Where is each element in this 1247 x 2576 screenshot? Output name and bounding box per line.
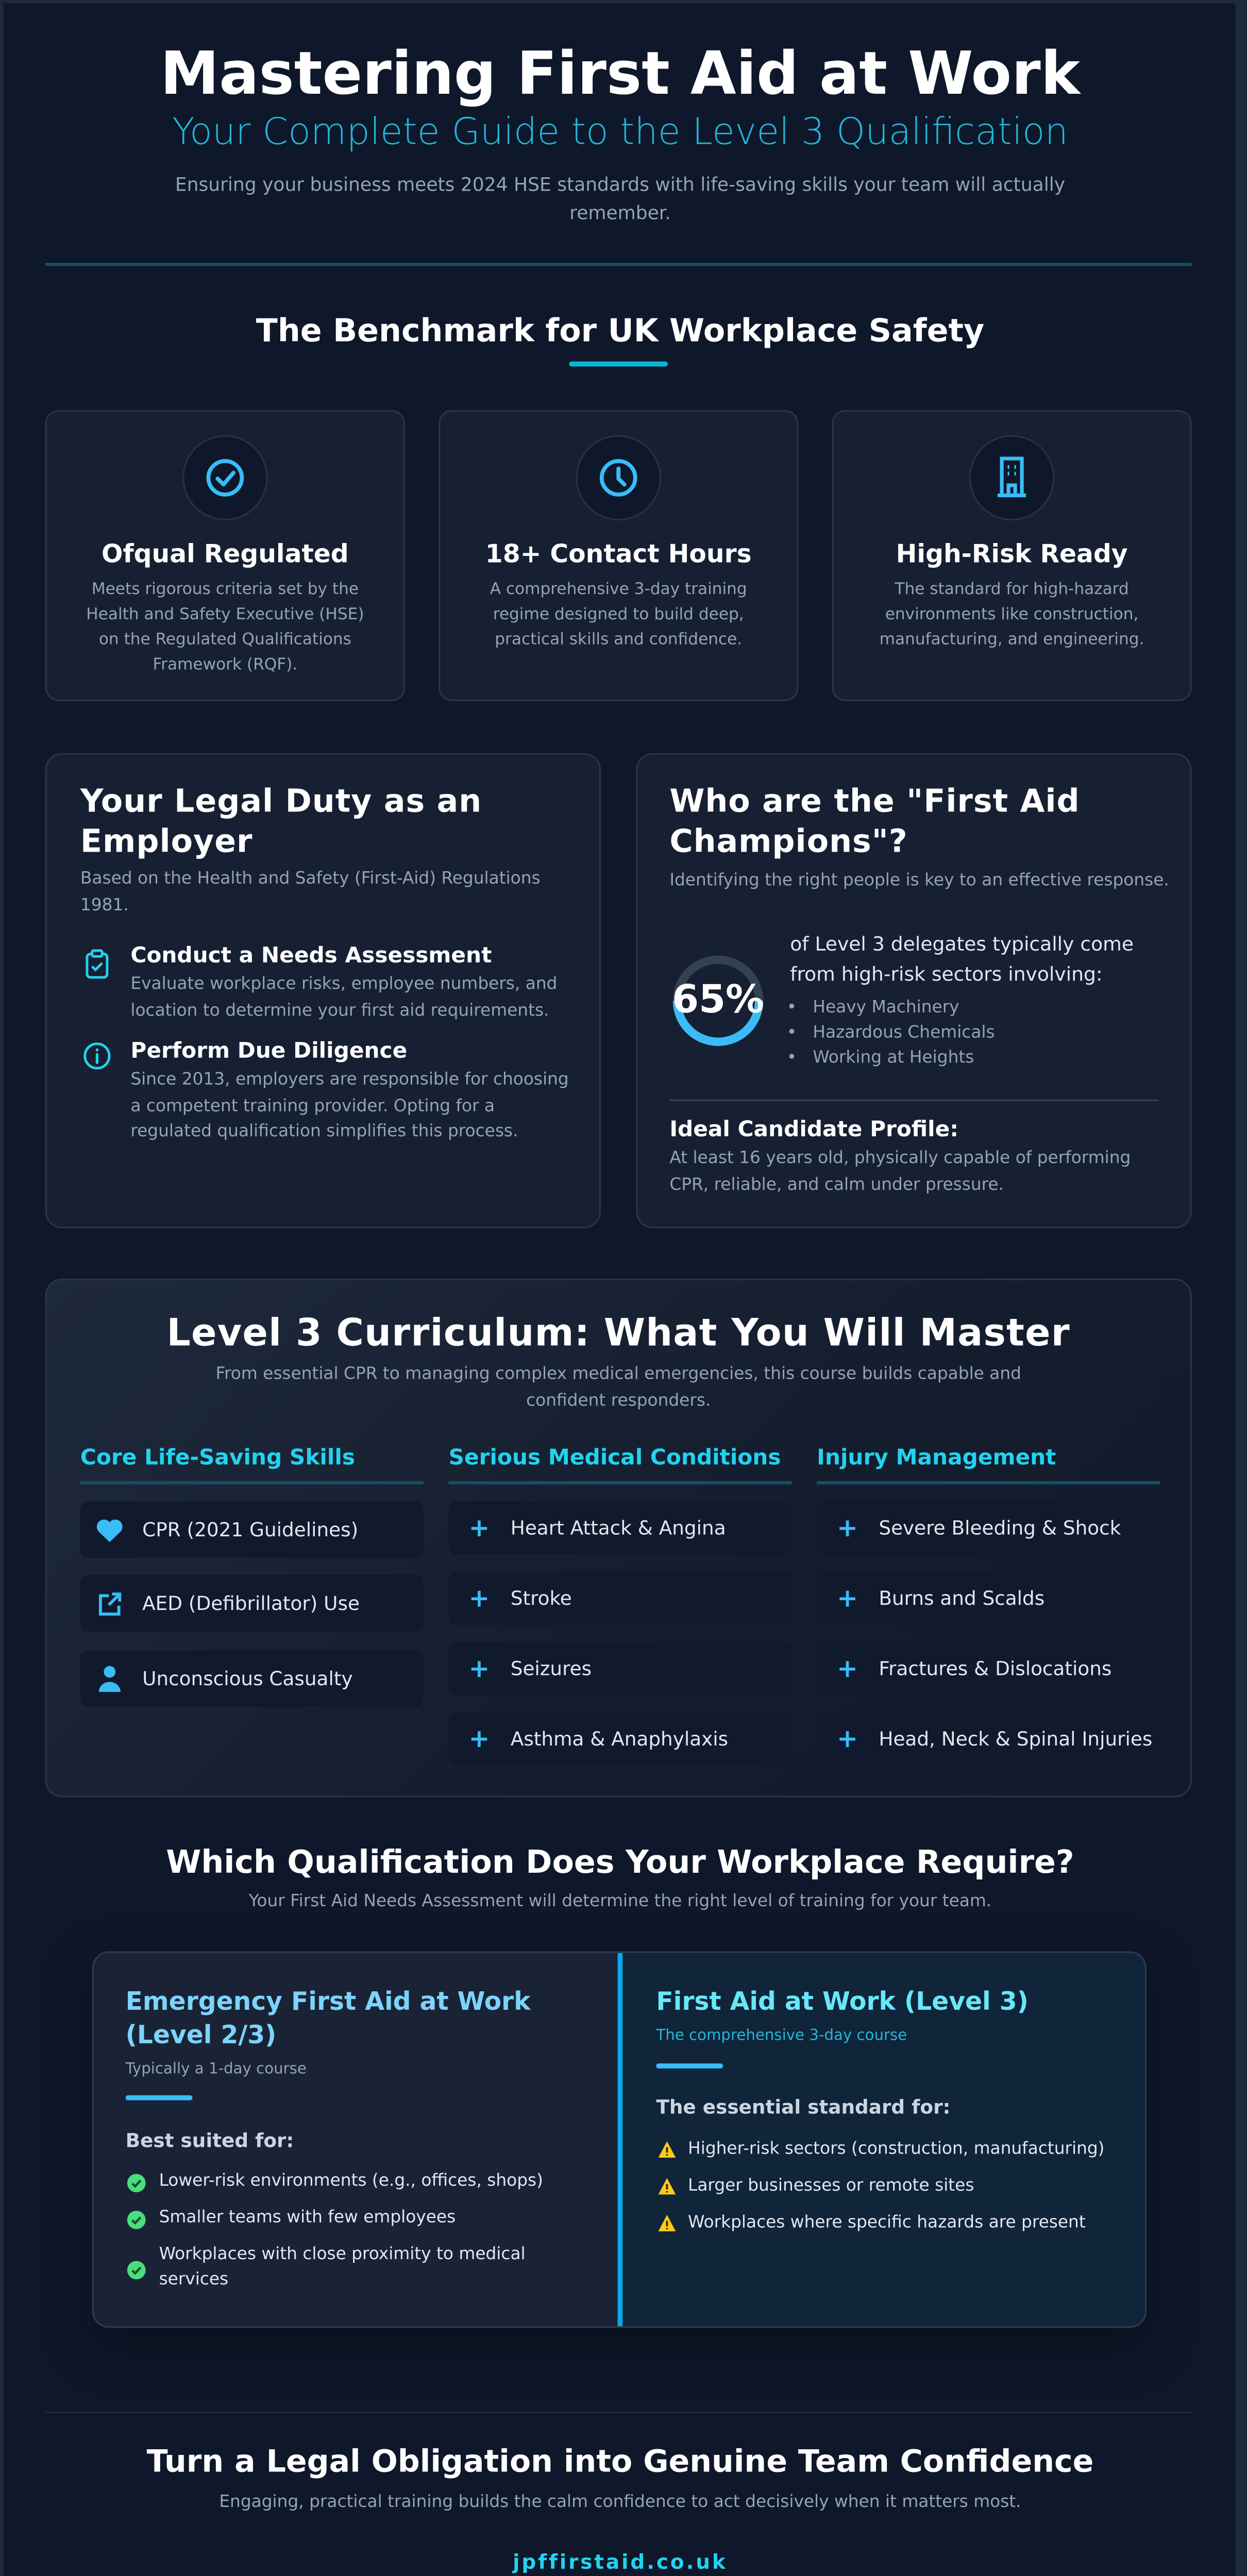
column: medical conditions: Serious Medical Conditions bbox=[449, 1446, 781, 1471]
card text: on the Regulated Qualifications bbox=[99, 631, 351, 649]
item: + bbox=[837, 1583, 858, 1613]
column: core skills: Core Life-Saving Skills bbox=[80, 1446, 355, 1471]
intro text: remember. bbox=[569, 202, 671, 224]
card text bbox=[490, 581, 747, 649]
item bbox=[817, 1571, 1160, 1625]
sector list: • Heavy Machinery bbox=[787, 999, 959, 1018]
item: AED bbox=[80, 1575, 424, 1632]
curriculum subtitle bbox=[47, 1362, 1190, 1414]
list: best suited: Workplaces with close proximity to medical bbox=[159, 2246, 526, 2264]
card: 18+ Contact Hours bbox=[439, 410, 798, 701]
item bbox=[817, 1712, 1160, 1766]
item bbox=[817, 1642, 1160, 1696]
item: + bbox=[469, 1653, 490, 1684]
card text: The standard for high-hazard bbox=[895, 581, 1129, 599]
item: + bbox=[837, 1724, 858, 1754]
item: due diligence bbox=[83, 1039, 569, 1141]
item: Seizures bbox=[511, 1657, 592, 1680]
intro text: Ensuring your business meets 2024 HSE standards with life-saving skills your team will actually bbox=[175, 174, 1065, 196]
option: first aid at work level 3: The comprehensive 3-day course bbox=[656, 2028, 907, 2045]
icon: clipboard bbox=[86, 949, 108, 979]
list: best suited bbox=[126, 2169, 611, 2303]
list: best suited: services bbox=[159, 2271, 228, 2290]
candidate profile bbox=[669, 1116, 1172, 1200]
comparison box bbox=[92, 1952, 1147, 2328]
panel subtitle: Based on the Health and Safety (First-Aid) Regulations bbox=[80, 870, 541, 889]
option: emergency first aid: (Level 2/3) bbox=[126, 2020, 276, 2050]
curriculum subtitle: From essential CPR to managing complex medical emergencies, this course builds capable and bbox=[216, 1366, 1021, 1384]
card text bbox=[880, 581, 1144, 649]
list: essential for: Larger businesses or remote sites bbox=[688, 2177, 974, 2196]
item: due diligence: a competent training provider. Opting for a bbox=[130, 1097, 495, 1115]
card text: environments like construction, bbox=[885, 606, 1138, 624]
card text: regime designed to build deep, bbox=[493, 606, 744, 624]
card: Ofqual Regulated bbox=[45, 410, 405, 701]
icon: check circle bbox=[182, 435, 268, 520]
item: CPR bbox=[80, 1501, 424, 1558]
section heading: which qualification bbox=[0, 1841, 1240, 1921]
item: needs assessment: Conduct a Needs Assessment bbox=[130, 944, 492, 969]
title: Mastering First Aid at Work bbox=[160, 40, 1080, 109]
panel title: Employer bbox=[80, 823, 252, 860]
panel title bbox=[80, 783, 482, 860]
stat text bbox=[790, 932, 1134, 986]
item: due diligence: regulated qualification simplifies this process. bbox=[130, 1123, 518, 1141]
candidate profile: Ideal Candidate Profile: bbox=[669, 1118, 958, 1143]
item: Head, Neck & Spinal Injuries bbox=[879, 1727, 1152, 1751]
item: + bbox=[469, 1583, 490, 1613]
panel: first aid champions bbox=[636, 753, 1192, 1228]
card: High-Risk Ready bbox=[832, 410, 1192, 701]
section heading: benchmark: The Benchmark for UK Workplace Safety bbox=[256, 313, 984, 350]
column: medical conditions bbox=[449, 1443, 791, 1777]
intro text bbox=[175, 174, 1065, 224]
sector list bbox=[787, 999, 995, 1067]
option: emergency first aid: Emergency First Aid at Work bbox=[126, 1987, 531, 2016]
panel title bbox=[669, 783, 1080, 860]
section heading: which qualification: Which Qualification Does Your Workplace Require? bbox=[166, 1844, 1074, 1881]
option: emergency first aid bbox=[94, 1953, 619, 2330]
candidate profile: At least 16 years old, physically capable of performing bbox=[669, 1150, 1131, 1168]
item: due diligence: Perform Due Diligence bbox=[130, 1039, 407, 1064]
header bbox=[160, 40, 1081, 224]
panel: curriculum bbox=[45, 1279, 1192, 1798]
card title: Ofqual Regulated bbox=[102, 539, 349, 569]
item: Severe Bleeding & Shock bbox=[879, 1516, 1121, 1539]
list: essential for: Higher-risk sectors (construction, manufacturing) bbox=[688, 2141, 1104, 2159]
curriculum subtitle: confident responders. bbox=[526, 1392, 711, 1410]
item: CPR: CPR (2021 Guidelines) bbox=[142, 1518, 358, 1541]
column: injury management: Injury Management bbox=[817, 1446, 1056, 1471]
card text: manufacturing, and engineering. bbox=[880, 631, 1144, 649]
item bbox=[449, 1642, 791, 1696]
subtitle: Your Complete Guide to the Level 3 Qualification bbox=[172, 112, 1068, 154]
item: Stroke bbox=[511, 1586, 572, 1610]
option: first aid at work level 3 bbox=[622, 1953, 1148, 2330]
footer text: Engaging, practical training builds the calm confidence to act decisively when it matters most. bbox=[219, 2494, 1021, 2512]
panel title: Your Legal Duty as an bbox=[80, 783, 482, 820]
item: due diligence: Since 2013, employers are responsible for choosing bbox=[130, 1071, 569, 1090]
item: + bbox=[837, 1513, 858, 1543]
card text: Health and Safety Executive (HSE) bbox=[86, 606, 364, 624]
option: first aid at work level 3: First Aid at Work (Level 3) bbox=[656, 1987, 1029, 2016]
item: needs assessment: location to determine your first aid requirements. bbox=[130, 1002, 549, 1020]
option: emergency first aid: Best suited for: bbox=[126, 2129, 294, 2152]
stat text: from high-risk sectors involving: bbox=[790, 962, 1103, 986]
card text: Meets rigorous criteria set by the bbox=[92, 581, 359, 599]
card text: A comprehensive 3-day training bbox=[490, 581, 747, 599]
ring chart 65%: 65% bbox=[672, 979, 764, 1023]
panel subtitle bbox=[80, 870, 541, 916]
ring chart 65% bbox=[672, 955, 764, 1046]
item: needs assessment: Evaluate workplace risks, employee numbers, and bbox=[130, 976, 557, 994]
item: needs assessment bbox=[86, 944, 557, 1020]
website: jpffirstaid.co.uk bbox=[513, 2550, 728, 2574]
list: best suited: Lower-risk environments (e.g., offices, shops) bbox=[159, 2172, 543, 2191]
card text bbox=[86, 581, 364, 674]
card text: Framework (RQF). bbox=[153, 656, 297, 674]
panel subtitle: 1981. bbox=[80, 897, 129, 916]
item: Fractures & Dislocations bbox=[879, 1657, 1111, 1680]
list: essential for bbox=[656, 2137, 1141, 2254]
item: + bbox=[837, 1653, 858, 1684]
item bbox=[817, 1501, 1160, 1555]
item: Heart Attack & Angina bbox=[511, 1516, 726, 1539]
item: Burns and Scalds bbox=[879, 1586, 1044, 1610]
item bbox=[449, 1571, 791, 1625]
item: Asthma & Anaphylaxis bbox=[511, 1727, 728, 1751]
panel title: Who are the "First Aid bbox=[669, 783, 1080, 820]
stat text: of Level 3 delegates typically come bbox=[790, 932, 1134, 956]
item: unconscious bbox=[80, 1650, 424, 1707]
curriculum title: Level 3 Curriculum: What You Will Master bbox=[167, 1312, 1070, 1355]
panel title: Champions"? bbox=[669, 823, 908, 860]
sector list: • Hazardous Chemicals bbox=[787, 1024, 995, 1043]
item: + bbox=[469, 1513, 490, 1543]
icon: building bbox=[969, 435, 1054, 520]
section heading: which qualification: Your First Aid Needs Assessment will determine the right level of training for your team. bbox=[249, 1893, 991, 1911]
option: emergency first aid: Typically a 1-day course bbox=[126, 2062, 307, 2078]
item bbox=[449, 1712, 791, 1766]
panel subtitle: Identifying the right people is key to an effective response. bbox=[669, 872, 1169, 890]
option: first aid at work level 3: The essential standard for: bbox=[656, 2095, 950, 2119]
candidate profile: CPR, reliable, and calm under pressure. bbox=[669, 1176, 1004, 1194]
list: essential for: Workplaces where specific hazards are present bbox=[688, 2214, 1086, 2232]
column: core skills bbox=[80, 1443, 424, 1710]
card title: High-Risk Ready bbox=[896, 539, 1128, 569]
item bbox=[449, 1501, 791, 1555]
panel: legal duty bbox=[45, 753, 601, 1228]
footer bbox=[0, 2442, 1240, 2576]
item: unconscious: Unconscious Casualty bbox=[142, 1667, 353, 1690]
column: injury management bbox=[817, 1443, 1160, 1777]
card text: practical skills and confidence. bbox=[495, 631, 742, 649]
card title: 18+ Contact Hours bbox=[485, 539, 752, 569]
icon: info bbox=[83, 1043, 111, 1070]
item: AED: AED (Defibrillator) Use bbox=[142, 1591, 360, 1615]
list: best suited: Smaller teams with few employees bbox=[159, 2209, 456, 2227]
item: + bbox=[469, 1724, 490, 1754]
sector list: • Working at Heights bbox=[787, 1049, 974, 1067]
footer heading: Turn a Legal Obligation into Genuine Team Confidence bbox=[147, 2445, 1093, 2480]
icon: clock bbox=[576, 435, 661, 520]
